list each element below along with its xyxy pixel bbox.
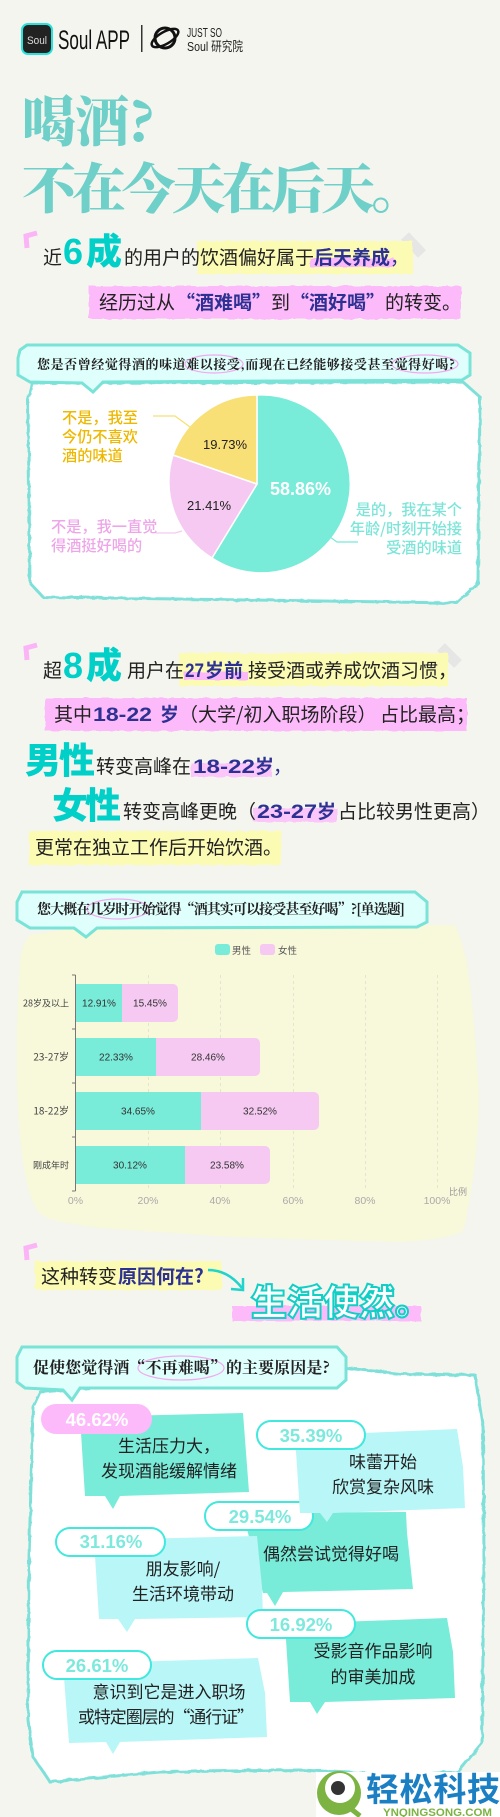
question bubble 3: 促使您觉得酒“不再难喝”的主要原因是? — [33, 1355, 330, 1378]
x axis labels: 0% — [68, 1195, 83, 1207]
second text block: 占比最高； — [380, 700, 475, 727]
second text block: 18-22 — [193, 757, 255, 778]
second text block: 岁 — [160, 700, 179, 727]
card: 26.61%: 或特定圈层的“通行证” — [78, 1703, 254, 1728]
bar values — [82, 998, 277, 1172]
second text block: 男性 — [25, 740, 95, 781]
card: 16.92%: 16.92% — [270, 1614, 332, 1635]
question bubble 1: 您是否曾经觉得酒的味道难以接受,而现在已经能够接受甚至觉得好喝? — [37, 354, 455, 373]
second text block: 转变高峰更晚（ — [123, 797, 256, 824]
intro text block: 的转变。 — [385, 288, 461, 315]
legend — [215, 943, 298, 957]
x axis labels: 40% — [209, 1195, 231, 1207]
bar values: 12.91% — [82, 998, 116, 1010]
card: 29.54% — [205, 1502, 413, 1606]
pie values: 21.41% — [187, 498, 232, 513]
card: 31.16%: 朋友影响/ — [146, 1555, 221, 1580]
intro text block: 近 — [43, 243, 62, 270]
card: 46.62% — [41, 1404, 249, 1509]
panel: taste pie chart — [18, 345, 480, 603]
second text block: 其中 — [54, 700, 92, 727]
intro text block: 的用户的饮酒偏好属于 — [124, 243, 314, 270]
pie label: pink: 不是，我一直觉 — [51, 515, 157, 537]
card: 35.39%: 欣赏复杂风味 — [332, 1473, 434, 1498]
card: 31.16% — [56, 1528, 263, 1632]
intro text block — [26, 231, 461, 319]
logo: Soul APP — [22, 24, 243, 55]
second text block: 占比较男性更高） — [338, 797, 490, 824]
pie values — [187, 437, 331, 513]
x axis labels: 20% — [137, 1195, 159, 1207]
card: 46.62%: 46.62% — [66, 1409, 128, 1430]
card: 26.61% — [43, 1651, 267, 1754]
reason heading — [26, 1245, 431, 1326]
intro text block: ， — [390, 243, 409, 270]
card: 35.39%: 味蕾开始 — [349, 1448, 417, 1473]
legend: 男性 — [232, 943, 252, 957]
reason heading: 原因何在? — [118, 1262, 204, 1289]
second text block: 岁 — [317, 797, 336, 824]
reason heading: 这种转变 — [41, 1262, 117, 1289]
second text block: 8成 — [63, 645, 122, 686]
pie label: yellow: 酒的味道 — [62, 444, 123, 466]
arrow — [208, 1270, 243, 1290]
card: 26.61%: 意识到它是进入职场 — [92, 1678, 246, 1703]
title: 喝酒? — [22, 80, 155, 157]
bar values: 30.12% — [113, 1160, 147, 1172]
card: 35.39% — [257, 1421, 465, 1522]
legend: 女性 — [278, 943, 298, 957]
question bubble 2: 您大概在几岁时开始觉得“酒其实可以接受甚至好喝”?[单选题] — [37, 899, 405, 919]
watermark: 轻松科技 — [366, 1763, 500, 1811]
pie chart — [169, 395, 350, 573]
card: 35.39%: 35.39% — [280, 1425, 342, 1446]
pie values: 19.73% — [203, 437, 248, 452]
panel: age bar chart — [17, 892, 479, 1242]
x axis labels — [68, 1185, 467, 1207]
card: 29.54%: 29.54% — [229, 1506, 291, 1527]
title — [22, 80, 425, 224]
pie label: teal: 是的，我在某个 — [356, 498, 462, 520]
logo: Soul APP: Soul APP — [58, 25, 130, 55]
category labels — [23, 996, 69, 1172]
intro text block: 后天养成 — [314, 243, 390, 270]
card: 46.62%: 发现酒能缓解情绪 — [101, 1457, 237, 1482]
second text block: 更常在独立工作后开始饮酒。 — [35, 833, 282, 860]
second text block: （大学/初入职场阶段） — [179, 700, 376, 727]
pie values: 58.86% — [270, 479, 331, 499]
x axis labels: 100% — [424, 1195, 450, 1207]
x axis labels: 60% — [282, 1195, 304, 1207]
second text block: 超 — [43, 656, 62, 683]
bars — [76, 984, 319, 1184]
panel: reasons — [17, 1347, 484, 1782]
bar values: 15.45% — [133, 998, 167, 1010]
axis — [72, 975, 76, 1191]
intro text block: “酒好喝” — [290, 288, 385, 315]
bar values: 28.46% — [191, 1052, 225, 1064]
category labels: 28岁及以上 — [23, 996, 69, 1010]
category labels: 刚成年时 — [33, 1158, 69, 1172]
x axis labels: 比例 — [449, 1185, 467, 1198]
second text block — [25, 645, 490, 865]
card: 31.16%: 生活环境带动 — [132, 1580, 234, 1605]
logo: Soul APP: Soul 研究院 — [187, 39, 243, 54]
slogan: 生活使然 — [251, 1274, 395, 1326]
card: 29.54%: 偶然尝试觉得好喝 — [263, 1540, 399, 1565]
card: 16.92%: 的审美加成 — [330, 1663, 416, 1688]
card: 31.16%: 31.16% — [80, 1531, 142, 1552]
bar values: 22.33% — [99, 1052, 133, 1064]
pie label: teal — [350, 498, 462, 558]
second text block: 接受酒或养成饮酒习惯， — [248, 656, 457, 683]
x axis labels: 80% — [354, 1195, 376, 1207]
pie label: yellow: 今仍不喜欢 — [62, 425, 138, 447]
bar values: 34.65% — [121, 1106, 155, 1118]
bar values: 23.58% — [210, 1160, 244, 1172]
pie label: pink — [51, 515, 157, 556]
pie label: pink: 得酒挺好喝的 — [51, 534, 142, 556]
second text block: 18-22 — [93, 705, 152, 726]
card: 46.62%: 生活压力大， — [118, 1432, 220, 1457]
category labels: 18-22岁 — [33, 1102, 69, 1118]
second text block: ， — [273, 752, 292, 779]
intro text block: 6成 — [63, 231, 122, 272]
watermark — [316, 1763, 500, 1817]
intro text block: 到 — [271, 288, 290, 315]
card: 16.92%: 受影音作品影响 — [314, 1637, 432, 1662]
pie label: teal: 年龄/时刻开始接 — [350, 517, 462, 539]
title: 不在今天在后天。 — [22, 147, 425, 224]
second text block: 23-27 — [257, 802, 317, 823]
intro text block: “酒难喝” — [176, 288, 271, 315]
pie label: yellow — [62, 406, 138, 466]
bar values: 32.52% — [243, 1106, 277, 1118]
intro text block: 经历过从 — [99, 288, 175, 315]
pie leader lines — [153, 416, 358, 542]
slogan: 。 — [395, 1273, 431, 1325]
logo: Soul APP: Soul — [27, 35, 47, 47]
question bubble 2 — [17, 892, 427, 937]
logo: Soul APP: JUST SO — [187, 25, 222, 40]
second text block: 用户在 — [127, 656, 184, 683]
second text block: 27 — [185, 661, 204, 682]
pie label: teal: 受酒的味道 — [386, 536, 462, 558]
card: 26.61%: 26.61% — [66, 1655, 128, 1676]
second text block: 转变高峰在 — [96, 752, 191, 779]
category labels: 23-27岁 — [33, 1048, 69, 1064]
question bubble 3 — [17, 1347, 346, 1400]
second text block: 岁前 — [205, 656, 243, 683]
question bubble 1 — [18, 345, 470, 392]
card: 16.92% — [247, 1610, 455, 1714]
pie label: yellow: 不是，我至 — [62, 406, 138, 428]
second text block: 岁 — [255, 752, 274, 779]
second text block: 女性 — [52, 785, 121, 826]
